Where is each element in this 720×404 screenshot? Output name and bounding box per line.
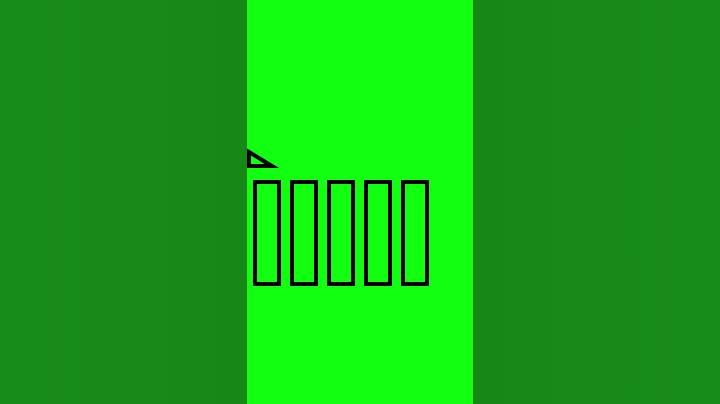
icon: rectangles <box>255 182 427 284</box>
panel: right background <box>473 0 720 404</box>
panel: left background <box>0 0 247 404</box>
icon: triangle <box>249 152 272 166</box>
panel: center bright green <box>247 0 473 404</box>
